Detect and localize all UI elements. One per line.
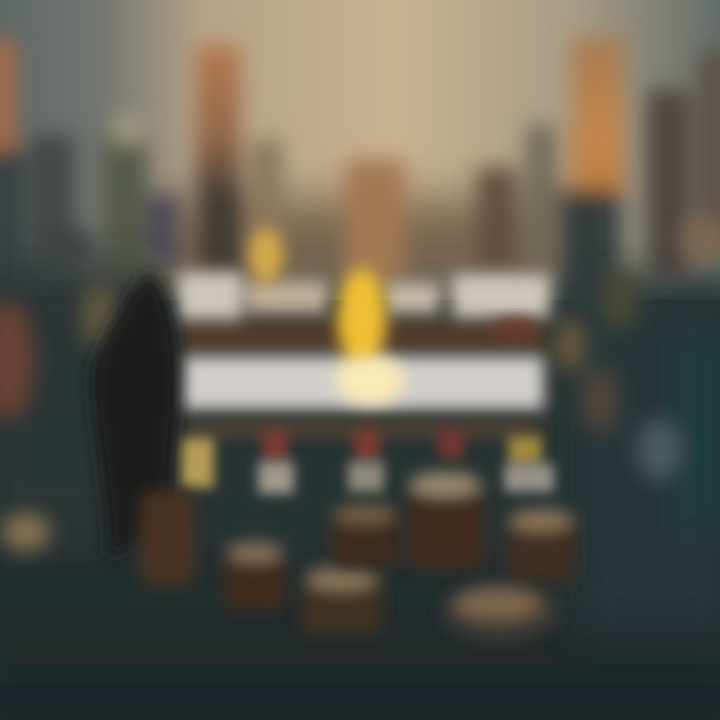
drum 4	[407, 472, 485, 568]
drum 3	[332, 504, 398, 568]
side details: warm blobs	[0, 214, 720, 550]
silhouette: standing person	[91, 268, 195, 585]
upper tier white cloths	[178, 272, 550, 320]
drums: group of brown cylinders	[225, 472, 575, 642]
skyline: distant and side towers	[0, 38, 720, 320]
background: horizon haze	[150, 200, 570, 290]
lower tier brown edge	[185, 420, 540, 438]
lower tier white cloth	[182, 356, 544, 410]
central flame	[337, 268, 387, 368]
upper tier red accents	[493, 318, 537, 338]
upper tier brown base	[180, 318, 545, 354]
flame: central and rear glow	[249, 228, 404, 404]
drum 1	[225, 542, 285, 610]
background: sky	[0, 0, 720, 300]
figures: row below table	[180, 430, 554, 494]
plate	[442, 582, 558, 642]
rear flame	[249, 228, 283, 284]
silhouette lower body	[140, 490, 195, 585]
glow on lower tier	[336, 356, 404, 404]
table: lower tier	[182, 356, 544, 438]
silhouette upper body	[91, 268, 179, 560]
side crowds: dark left and right masses	[0, 270, 720, 630]
table: upper tier	[178, 272, 550, 354]
background: dark lower ground	[0, 285, 720, 720]
drum 2	[302, 566, 382, 634]
drum 5	[507, 509, 575, 582]
